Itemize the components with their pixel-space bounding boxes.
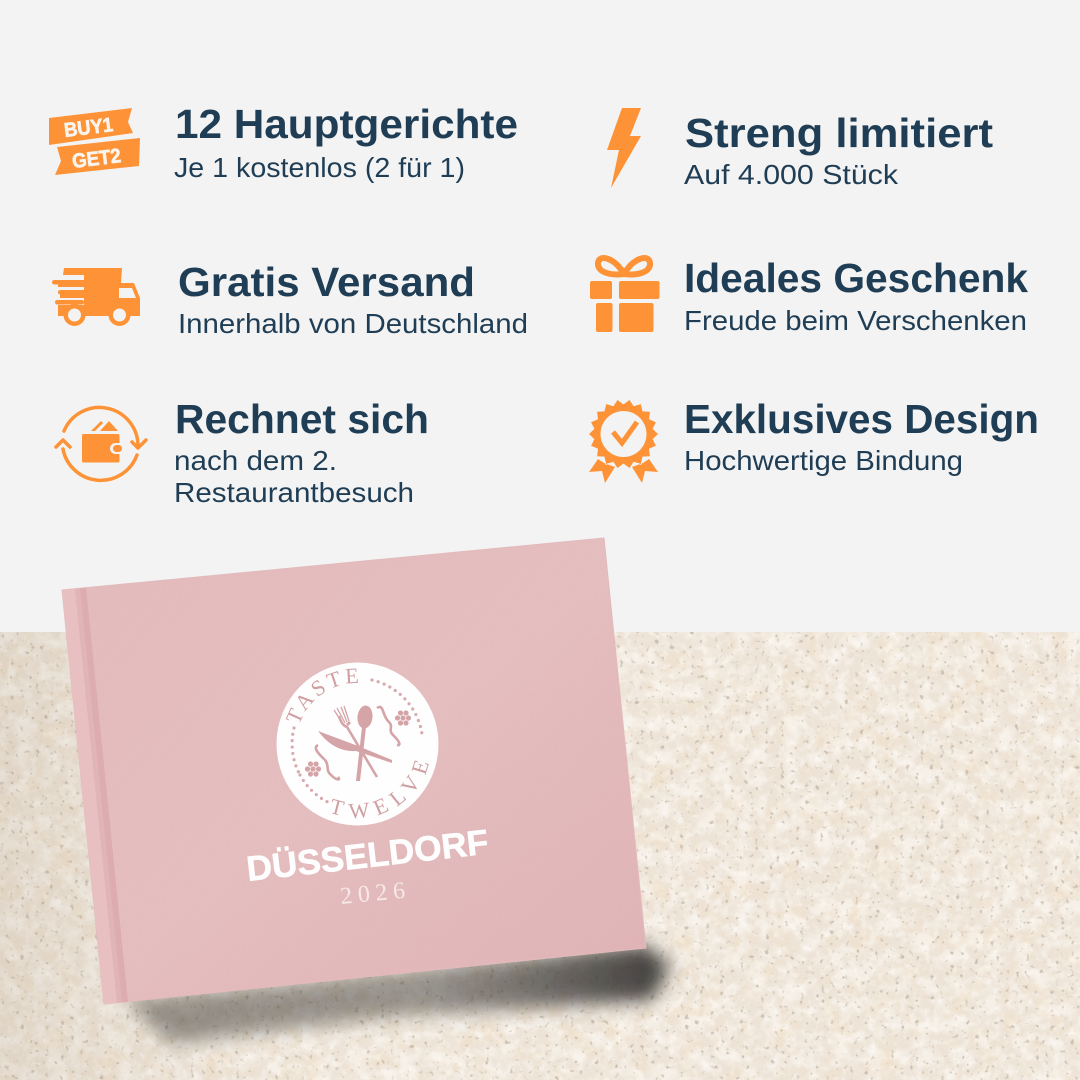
spoon: [356, 705, 374, 729]
feature: Exklusives Design: [589, 396, 1039, 483]
arc guides for lettering: [299, 683, 370, 726]
icon: gift box: [590, 258, 660, 332]
icon: lightning bolt: [607, 108, 641, 188]
seal word: TASTE: TASTE: [286, 668, 358, 722]
logo: Taste Twelve seal: [276, 662, 438, 826]
feature: Ideales Geschenk: [590, 255, 1028, 336]
subtext line two: Restaurantbesuch: [174, 477, 414, 508]
subtext: Hochwertige Bindung: [684, 445, 963, 476]
subtext: Je 1 kostenlos (2 für 1): [174, 152, 465, 183]
heading: Rechnet sich: [175, 396, 429, 442]
heading: Ideales Geschenk: [684, 255, 1028, 301]
heading: Gratis Versand: [178, 259, 475, 305]
book cover: [62, 538, 646, 1004]
sand texture background: [0, 632, 1080, 1080]
icon: buy 1 get 2 ribbons: GET2: [71, 145, 122, 173]
grape and vine ornaments: [305, 707, 411, 779]
fork: [334, 706, 377, 777]
knife: [318, 731, 392, 763]
icon: delivery truck: [52, 268, 140, 326]
heading: 12 Hauptgerichte: [175, 101, 518, 147]
cutlery: fork, spoon and knife: [318, 705, 392, 781]
feature: Rechnet sich: [56, 396, 429, 508]
subtext: Auf 4.000 Stück: [684, 159, 899, 190]
icon: buy 1 get 2 ribbons: BUY1: [63, 114, 114, 142]
dotted ring: [292, 680, 422, 804]
feature: 12 Hauptgerichte: [49, 101, 518, 183]
subtext: Freude beim Verschenken: [684, 305, 1027, 336]
feature: Gratis Versand: [52, 259, 528, 339]
seal word: TWELVE: TWELVE: [332, 760, 429, 818]
subtext: nach dem 2.: [174, 445, 337, 476]
page background: [0, 0, 1080, 632]
book: [62, 538, 646, 1004]
book title: Düsseldorf: DÜSSELDORF: [244, 823, 490, 889]
icon: wallet with circular arrows: [56, 407, 146, 480]
book drop shadow: [125, 945, 670, 1044]
subtext: Innerhalb von Deutschland: [178, 308, 528, 339]
book year: 2026: [339, 878, 406, 910]
heading: Streng limitiert: [685, 110, 993, 156]
heading: Exklusives Design: [684, 396, 1039, 442]
feature: Streng limitiert: [607, 108, 993, 190]
seal disc: [276, 662, 438, 826]
icon: buy 1 get 2 ribbons: [49, 108, 140, 175]
icon: award rosette: [589, 400, 658, 483]
book spine: [62, 588, 128, 1004]
